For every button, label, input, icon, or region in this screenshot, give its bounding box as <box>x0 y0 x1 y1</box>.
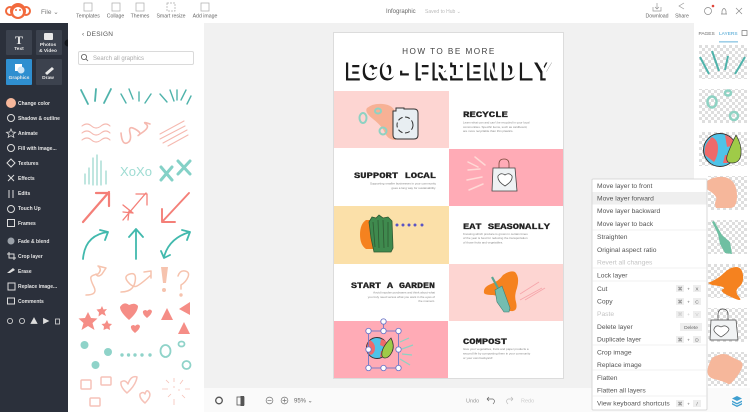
keyboard shortcuts: ⌘ <box>678 312 683 318</box>
start a garden body: the moment. <box>418 299 435 303</box>
keyboard shortcuts: + <box>687 313 690 318</box>
panel: recycle <box>334 91 563 148</box>
support local body <box>370 182 436 190</box>
toolbar items: Themes <box>131 14 150 20</box>
logo: monkey <box>6 3 30 19</box>
shopping bag illustration <box>467 157 517 191</box>
panel: compost <box>334 321 563 378</box>
tool list: Erase <box>18 269 32 275</box>
context menu <box>592 179 707 410</box>
bottom bar <box>204 388 750 412</box>
keyboard shortcuts: C <box>695 300 699 306</box>
panel: support local <box>334 148 563 206</box>
context menu: Cut <box>597 286 608 293</box>
context menu: Move layer backward <box>597 208 660 215</box>
context menu: Move layer forward <box>597 196 654 202</box>
support local body: Supporting smaller businesses in your community <box>370 182 436 186</box>
left tool sidebar <box>0 23 72 412</box>
context menu: Lock layer <box>597 272 628 280</box>
compost body: second life by composting them in your community <box>463 352 531 356</box>
tool list: Fill with image... <box>18 146 57 152</box>
eat seasonally body: of those fruits and vegetables. <box>463 240 503 244</box>
graphics row: bars, xoxo, crosses: XoXo <box>120 164 152 179</box>
graphics row: teal arrows <box>83 229 190 259</box>
tool list: Edits <box>18 191 30 197</box>
context menu: Move layer to back <box>597 221 654 228</box>
graphics row: teal bursts <box>81 89 191 104</box>
title: HOW TO BE MORE <box>402 47 496 56</box>
zoom value: 95% ⌄ <box>294 398 313 404</box>
support local body: goes a long way for sustainability. <box>391 186 436 190</box>
keyboard shortcuts: + <box>687 300 690 306</box>
compost heading: COMPOST <box>463 337 507 347</box>
help, bell, close icons <box>704 5 742 14</box>
context menu: View keyboard shortcuts <box>597 400 670 408</box>
panel: start a garden <box>334 264 563 321</box>
layer tabs <box>698 30 747 42</box>
keyboard shortcuts: ⌘ <box>678 300 683 306</box>
context menu: Flatten all layers <box>597 388 646 394</box>
layer tabs: LAYERS <box>719 31 738 37</box>
tool buttons: & Video <box>39 48 57 54</box>
tool list: Fade & blend <box>18 239 49 245</box>
edit action icons <box>7 318 59 324</box>
layer: earth <box>704 134 741 166</box>
tool buttons: Text <box>14 46 24 52</box>
start a garden body <box>368 290 435 303</box>
tool list: Change color <box>18 101 50 107</box>
keyboard shortcuts: + <box>687 288 690 292</box>
recycle body: are more recyclable than thin plastics. <box>463 129 514 133</box>
settings and view icons <box>216 396 244 406</box>
layers stack icon <box>732 396 742 407</box>
tool list: Textures <box>18 161 39 167</box>
start a garden body: you truly need versus what you want in the eyes of <box>368 295 435 299</box>
zoom controls <box>266 397 288 404</box>
layer: peach blob <box>707 354 743 384</box>
tool list: Touch Up <box>18 206 41 212</box>
tool buttons: T <box>15 33 23 47</box>
heading shadow and face: ECO-FRIENDLY <box>345 60 551 88</box>
tool buttons: Graphics <box>9 75 30 81</box>
context menu: Straighten <box>597 234 628 241</box>
toolbar items: Add image <box>193 14 218 20</box>
context menu: Replace image <box>597 362 642 369</box>
support local heading: SUPPORT LOCAL <box>354 171 436 181</box>
context menu: Duplicate layer <box>597 336 642 344</box>
keyboard shortcuts: / <box>696 402 698 408</box>
recycle heading: RECYCLE <box>463 110 508 120</box>
eat seasonally heading: EAT SEASONALLY <box>463 222 551 232</box>
graphics row: bars, xoxo, crosses <box>85 155 190 185</box>
tool list: Effects <box>18 176 35 182</box>
toolbar items: Smart resize <box>156 14 186 20</box>
toolbar items: Templates <box>76 14 100 20</box>
recycle body <box>463 120 530 133</box>
keyboard shortcuts: ⌘ <box>678 338 683 344</box>
context menu: Crop image <box>597 350 632 356</box>
download and share: Share <box>675 14 689 20</box>
toolbar items <box>76 3 218 20</box>
keyboard shortcuts: + <box>687 338 690 344</box>
layers panel <box>694 23 750 388</box>
tool buttons <box>6 30 62 85</box>
search box: Search all graphics <box>93 56 144 62</box>
earth and leaf illustration <box>366 338 413 365</box>
tool list: Shadow & outline <box>18 116 60 122</box>
compost body: or your own backyard! <box>463 356 493 360</box>
infographic document <box>334 32 564 378</box>
eat seasonally body: of the year is best for reducing the transportation <box>463 236 528 240</box>
context menu: Original aspect ratio <box>597 247 657 254</box>
graphics row: teal dots and rings <box>80 341 190 369</box>
context menu: Paste <box>597 311 614 318</box>
document title: Infographic <box>386 9 416 15</box>
context menu: Flatten <box>597 375 618 382</box>
layer: trowel <box>712 221 732 254</box>
heading shadow and face: ECO-FRIENDLY <box>347 59 552 86</box>
panel: eat seasonally <box>334 206 563 264</box>
layer: teal burst <box>700 51 745 74</box>
keyboard shortcuts: X <box>695 286 699 292</box>
toolbar items: Collage <box>107 14 124 20</box>
graphics row: squiggles, exclamation, question <box>86 266 189 297</box>
start a garden heading: START A GARDEN <box>351 281 435 291</box>
compost body <box>463 347 531 360</box>
download and share <box>645 3 689 20</box>
graphics row: pink waves <box>82 121 188 146</box>
layer: orange blob <box>708 267 743 300</box>
recycle body: Learn what can and can't be recycled in your local <box>463 120 530 124</box>
context menu: Delete layer <box>597 324 633 331</box>
context menu: Move layer to front <box>597 183 653 190</box>
tool list: Animate <box>18 131 38 137</box>
tool list <box>6 98 60 305</box>
keyboard shortcuts: V <box>695 312 699 318</box>
keyboard shortcuts: ⌘ <box>678 286 683 292</box>
eat seasonally body <box>463 232 528 244</box>
design heading: ‹ DESIGN <box>82 31 113 38</box>
collapse handle <box>64 40 72 46</box>
context menu: Revert all changes <box>597 260 653 266</box>
selection handles <box>366 319 401 371</box>
asparagus illustration <box>360 215 424 252</box>
tool buttons: Photos <box>40 42 56 48</box>
search box <box>78 52 194 64</box>
tool buttons: Draw <box>42 75 54 81</box>
recycle illustration <box>360 104 418 140</box>
tool list: Crop layer <box>18 254 43 260</box>
keyboard shortcuts <box>676 285 702 408</box>
tool list: Comments <box>18 299 44 305</box>
undo and redo: Redo <box>521 398 534 404</box>
graphics row: squares, hearts, sparkle <box>81 377 190 406</box>
top toolbar: Saved to Hub ⌄ <box>425 9 461 15</box>
keyboard shortcuts: D <box>695 338 699 344</box>
undo and redo <box>466 397 534 404</box>
file menu: File ⌄ <box>41 9 59 16</box>
eat seasonally body: Knowing which produce is grown in certain times <box>463 232 528 236</box>
start a garden body: Avoid impulse purchases and think about what <box>373 290 435 294</box>
layer: teal rings <box>708 90 738 120</box>
design panel <box>68 23 204 412</box>
layer: bag <box>710 309 738 340</box>
recycle body: communities. Specific items, such as cardboard, <box>463 125 527 129</box>
keyboard shortcuts: + <box>687 402 690 408</box>
keyboard shortcuts: Delete <box>684 325 698 331</box>
context menu: Copy <box>597 298 613 306</box>
layer tabs: PAGES <box>698 31 715 37</box>
graphics row: stars, hearts, triangles <box>78 302 190 334</box>
undo and redo: Undo <box>466 398 479 404</box>
top toolbar <box>0 0 750 23</box>
tool list: Frames <box>18 221 36 227</box>
graphics row: coral arrows <box>83 192 189 222</box>
download and share: Download <box>645 14 669 20</box>
layer: peach blob <box>704 177 737 208</box>
tool list: Replace image... <box>18 284 58 290</box>
keyboard shortcuts: ⌘ <box>678 402 683 408</box>
compost body: Give your vegetables, fruits and paper products a <box>463 347 529 351</box>
trowel illustration <box>484 271 545 312</box>
